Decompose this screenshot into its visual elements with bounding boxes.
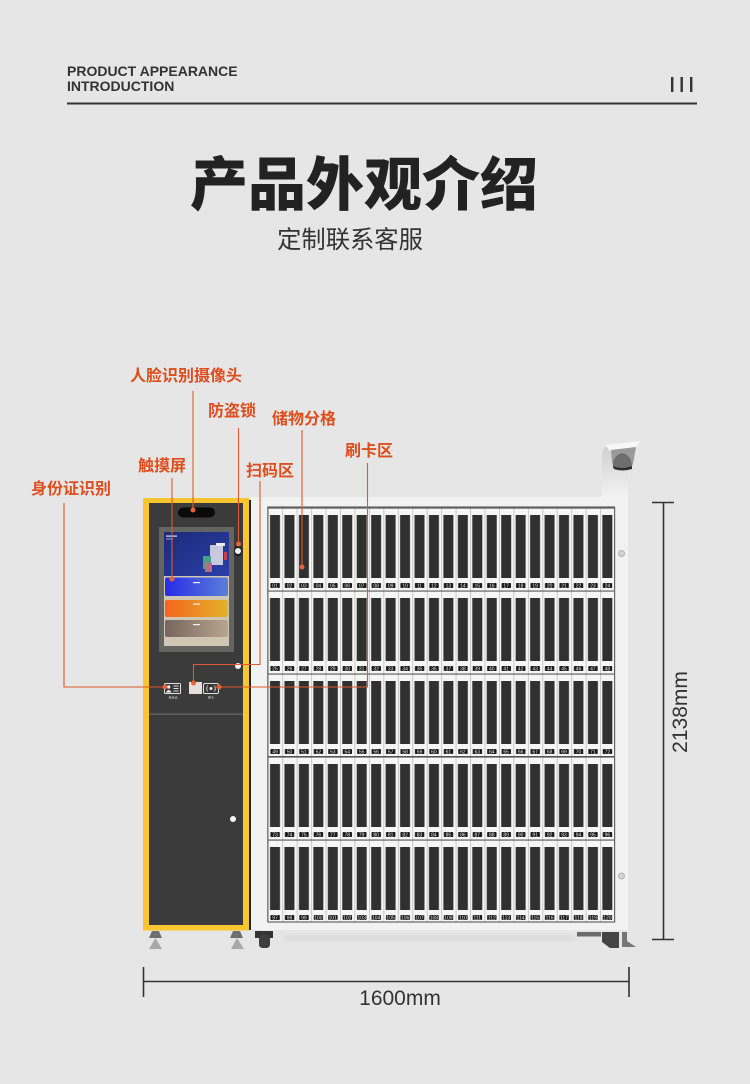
wheels and feet	[255, 931, 636, 948]
compartment numbers: 18	[518, 584, 524, 590]
height dimension	[652, 502, 692, 940]
compartment numbers: 69	[561, 750, 567, 756]
compartment numbers: 49	[272, 750, 278, 756]
compartment numbers	[272, 584, 612, 922]
compartment numbers: 57	[388, 750, 394, 756]
compartment numbers: 34	[402, 666, 408, 672]
ID reader	[164, 683, 181, 700]
compartment numbers: 03	[301, 584, 307, 590]
label: ID recognition: 身份证识别	[31, 480, 111, 498]
compartment numbers: 77	[330, 832, 336, 838]
compartment numbers: 100	[314, 916, 323, 922]
compartment numbers: 31	[359, 666, 365, 672]
compartment numbers: 10	[402, 584, 408, 590]
compartment numbers: 22	[576, 584, 581, 590]
header text: product appearance: INTRODUCTION	[67, 78, 174, 94]
compartment numbers: 82	[402, 832, 408, 838]
compartment numbers: 02	[287, 584, 292, 590]
compartment numbers: 43	[532, 666, 538, 672]
compartment numbers: 71	[590, 750, 596, 756]
compartment numbers: 70	[576, 750, 581, 756]
camera notch	[178, 508, 215, 518]
compartment numbers: 37	[446, 666, 451, 672]
compartment numbers: 60	[431, 750, 437, 756]
side knobs	[618, 550, 624, 879]
compartment numbers: 120	[603, 916, 612, 922]
compartment numbers: 45	[561, 666, 567, 672]
compartment numbers: 92	[547, 832, 553, 838]
compartment numbers: 94	[576, 832, 581, 838]
compartment numbers: 06	[345, 584, 350, 590]
compartment numbers: 117	[560, 916, 568, 922]
label: anti-theft lock: 防盗锁	[208, 401, 256, 420]
compartment numbers: 73	[272, 832, 278, 838]
compartment numbers: 12	[431, 584, 437, 590]
compartment numbers: 27	[301, 666, 307, 672]
compartment numbers: 85	[446, 832, 451, 838]
compartment numbers: 106	[401, 916, 409, 922]
compartment numbers: 51	[301, 750, 307, 756]
compartment numbers: 56	[373, 750, 379, 756]
compartment numbers: 47	[590, 666, 596, 672]
yellow frame	[143, 498, 249, 930]
compartment numbers: 86	[460, 832, 466, 838]
compartment numbers: 119	[589, 916, 597, 922]
compartment numbers: 44	[547, 666, 553, 672]
compartment numbers: 78	[345, 832, 350, 838]
compartment numbers: 41	[503, 666, 509, 672]
card reader	[203, 683, 219, 700]
compartment numbers: 87	[475, 832, 480, 838]
compartment numbers: 107	[415, 916, 424, 922]
leader dots	[162, 508, 304, 690]
compartment numbers: 59	[417, 750, 422, 756]
compartment numbers: 40	[489, 666, 495, 672]
compartment numbers: 53	[330, 750, 336, 756]
compartment numbers: 61	[446, 750, 451, 756]
compartment numbers: 96	[605, 832, 610, 838]
card reader: 刷卡	[208, 694, 214, 700]
compartment numbers: 109	[444, 916, 453, 922]
cabinet body	[251, 497, 628, 930]
compartment numbers: 111	[473, 916, 481, 922]
compartment numbers: 63	[475, 750, 480, 756]
compartment numbers: 42	[518, 666, 524, 672]
compartment numbers: 07	[359, 584, 365, 590]
white indicator dots	[230, 546, 242, 822]
compartment numbers: 20	[547, 584, 553, 590]
compartment numbers: 99	[301, 916, 307, 922]
dark door	[149, 503, 243, 925]
camera post	[602, 441, 640, 497]
compartment numbers: 93	[561, 832, 567, 838]
compartment numbers: 26	[287, 666, 292, 672]
compartment numbers: 55	[359, 750, 365, 756]
screen illustration	[166, 536, 227, 572]
compartment numbers: 110	[459, 916, 467, 922]
label: touch screen: 触摸屏	[138, 457, 186, 475]
compartment numbers: 25	[272, 666, 278, 672]
compartment numbers: 32	[373, 666, 379, 672]
compartment numbers: 30	[345, 666, 350, 672]
compartment numbers: 65	[503, 750, 509, 756]
width value: 1600mm	[359, 987, 441, 1010]
compartment numbers: 19	[532, 584, 538, 590]
compartment numbers: 79	[359, 832, 365, 838]
label: scan area: 扫码区	[246, 462, 294, 480]
compartment numbers: 09	[388, 584, 394, 590]
compartment numbers: 104	[372, 916, 381, 922]
compartment numbers: 105	[386, 916, 395, 922]
compartment numbers: 28	[316, 666, 321, 672]
compartment numbers: 89	[503, 832, 509, 838]
compartment numbers: 48	[605, 666, 610, 672]
compartment numbers: 08	[373, 584, 379, 590]
compartment numbers: 116	[546, 916, 554, 922]
compartment numbers: 24	[605, 584, 610, 590]
compartment numbers: 98	[287, 916, 292, 922]
compartment numbers: 52	[316, 750, 321, 756]
compartment numbers: 13	[446, 584, 451, 590]
header text: product appearance: PRODUCT APPEARANCE	[67, 63, 238, 79]
ID reader: 身份证	[168, 694, 178, 700]
subtitle: 定制联系客服	[277, 227, 423, 254]
title: 产品外观介绍	[190, 153, 538, 218]
compartment numbers: 90	[518, 832, 524, 838]
compartment numbers: 101	[329, 916, 337, 922]
width dimension	[143, 967, 629, 1010]
compartment numbers: 114	[517, 916, 525, 922]
compartment numbers: 39	[475, 666, 480, 672]
compartment numbers: 68	[547, 750, 553, 756]
height value: 2138mm	[669, 671, 692, 753]
scan window	[189, 682, 202, 694]
compartment numbers: 17	[503, 584, 509, 590]
compartment numbers: 95	[590, 832, 596, 838]
compartment numbers: 54	[345, 750, 350, 756]
compartment numbers: 23	[590, 584, 596, 590]
compartment numbers: 01	[272, 584, 278, 590]
control cabinet	[143, 498, 251, 930]
compartment numbers: 36	[431, 666, 437, 672]
compartment numbers: 81	[388, 832, 394, 838]
compartment numbers: 83	[417, 832, 422, 838]
compartment grid	[268, 507, 615, 922]
compartment numbers: 11	[417, 584, 422, 590]
compartment numbers: 58	[402, 750, 408, 756]
compartment numbers: 35	[417, 666, 422, 672]
floor shadow	[285, 936, 575, 940]
compartment numbers: 91	[532, 832, 538, 838]
compartment numbers: 50	[287, 750, 292, 756]
compartment numbers: 112	[488, 916, 496, 922]
compartment numbers: 66	[518, 750, 524, 756]
compartment numbers: 05	[330, 584, 336, 590]
header	[67, 63, 697, 104]
compartment numbers: 76	[316, 832, 321, 838]
compartment numbers: 21	[561, 584, 567, 590]
compartment numbers: 29	[330, 666, 336, 672]
compartment numbers: 67	[532, 750, 538, 756]
compartment numbers: 72	[605, 750, 610, 756]
compartment numbers: 14	[460, 584, 466, 590]
compartment numbers: 74	[287, 832, 292, 838]
compartment numbers: 80	[373, 832, 379, 838]
compartment numbers: 33	[388, 666, 394, 672]
icon: three bars	[671, 77, 692, 92]
touch screen	[159, 527, 234, 652]
compartment numbers: 118	[575, 916, 583, 922]
compartment numbers: 04	[316, 584, 321, 590]
label: card swipe area: 刷卡区	[345, 442, 393, 460]
compartment numbers: 16	[489, 584, 495, 590]
compartment numbers: 64	[489, 750, 495, 756]
compartment numbers: 75	[301, 832, 307, 838]
compartment numbers: 108	[430, 916, 438, 922]
feet of control cabinet	[149, 931, 244, 949]
label: storage compartments: 储物分格	[272, 409, 336, 428]
compartment numbers: 46	[576, 666, 581, 672]
compartment numbers: 38	[460, 666, 466, 672]
leader lines	[64, 391, 368, 687]
compartment numbers: 103	[358, 916, 366, 922]
compartment numbers: 15	[475, 584, 480, 590]
storage cabinet	[251, 441, 640, 948]
compartment numbers: 88	[489, 832, 495, 838]
compartment numbers: 102	[343, 916, 352, 922]
callouts	[31, 366, 393, 690]
compartment numbers: 62	[460, 750, 466, 756]
compartment numbers: 115	[531, 916, 539, 922]
compartment numbers: 97	[272, 916, 278, 922]
label: face recognition camera: 人脸识别摄像头	[130, 366, 242, 385]
compartment numbers: 84	[431, 832, 437, 838]
compartment numbers: 113	[502, 916, 510, 922]
